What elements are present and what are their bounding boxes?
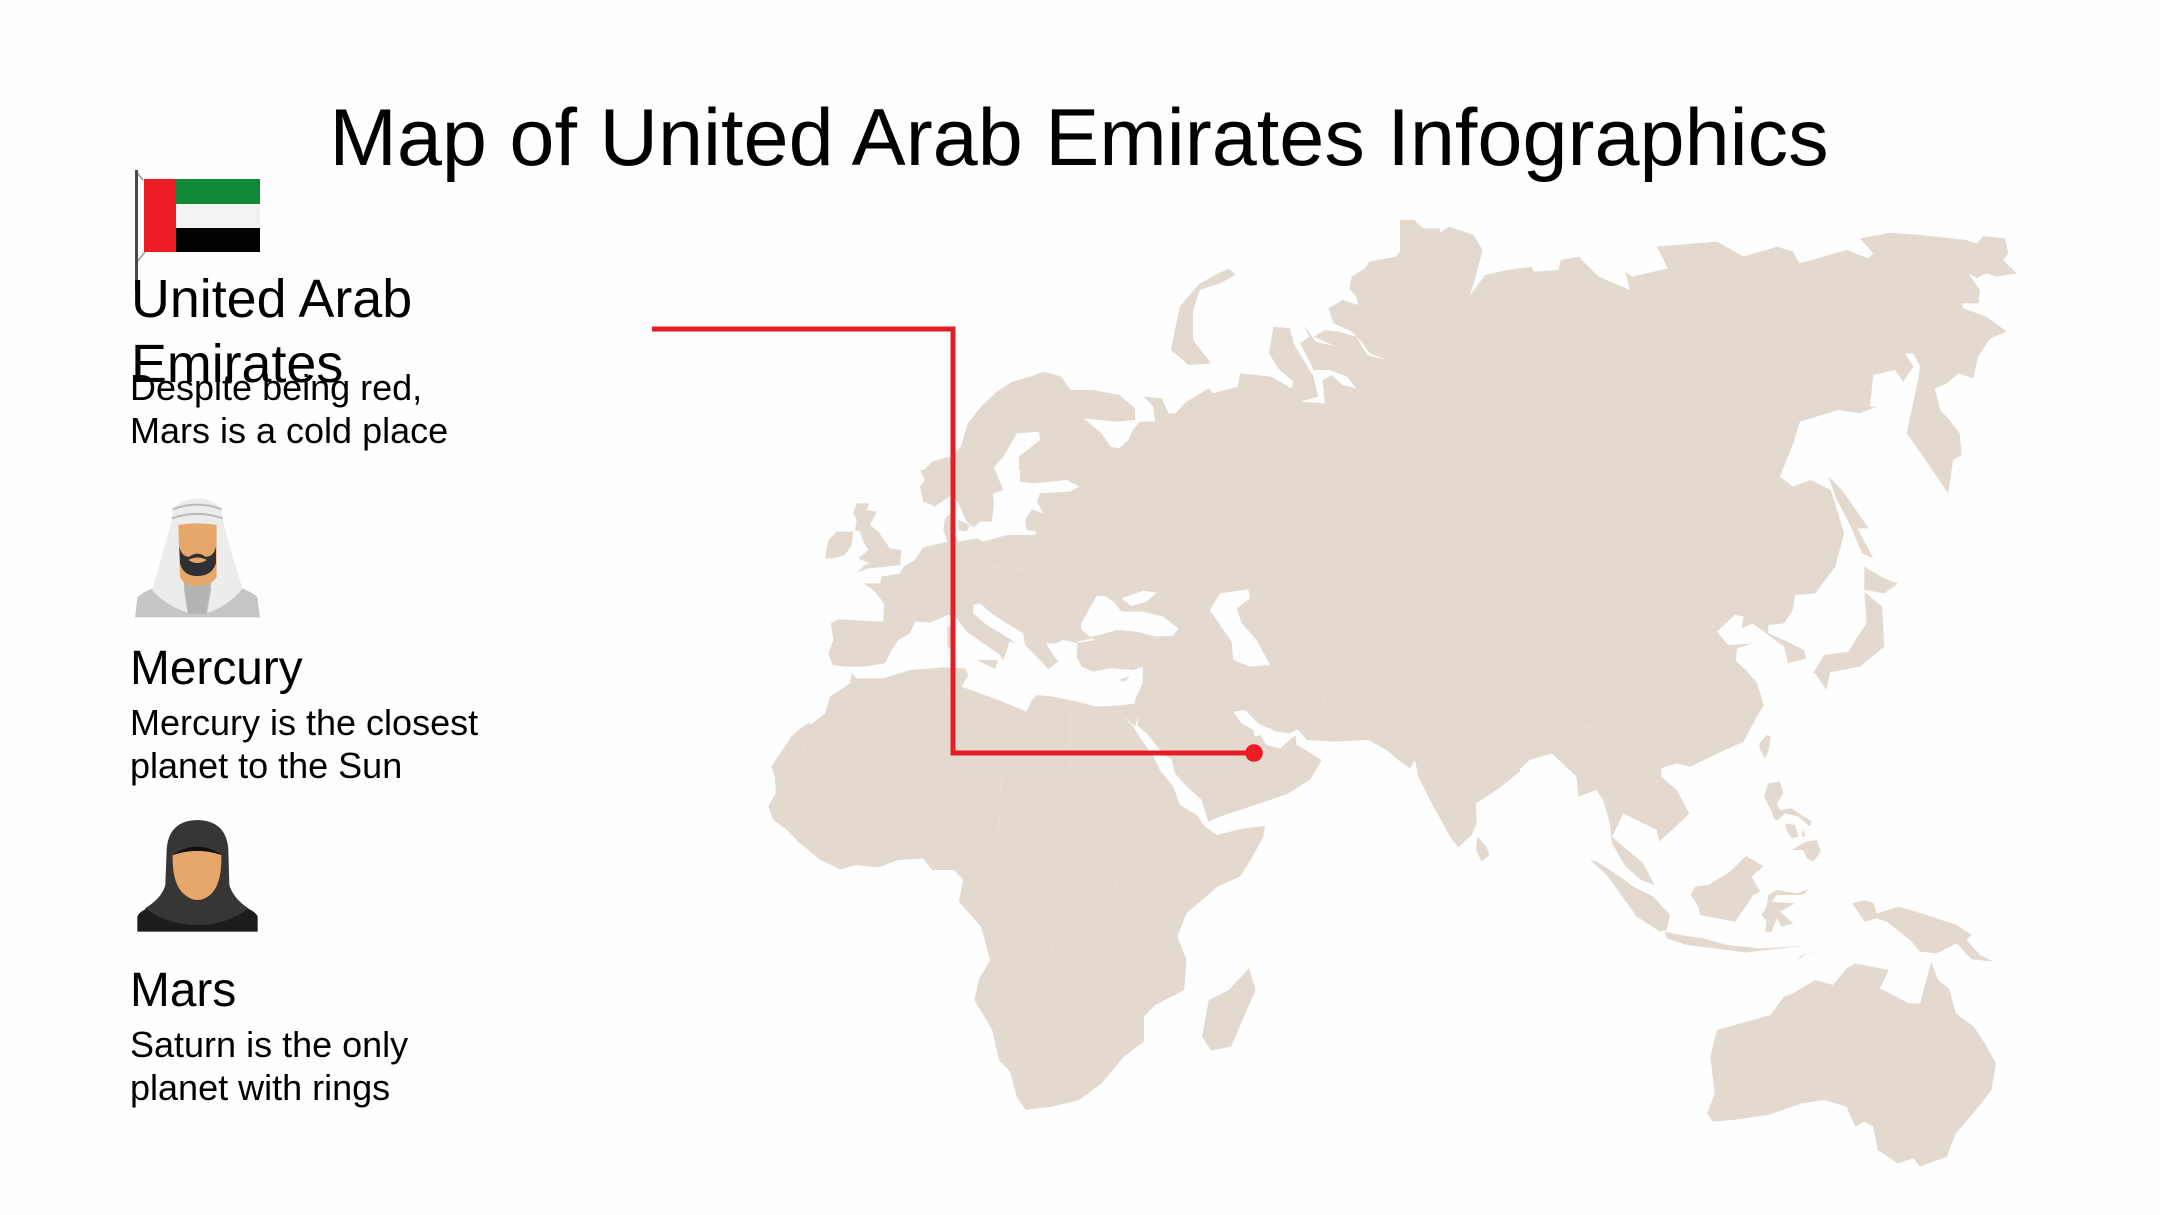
icon: UAE flag bbox=[135, 170, 260, 290]
text: Mercury description: planet to the Sun bbox=[130, 745, 402, 786]
map: Ireland bbox=[825, 532, 853, 558]
map: Mediterranean Sea bbox=[845, 615, 1143, 712]
map: Sri Lanka bbox=[1476, 837, 1489, 862]
title: Map of United Arab Emirates Infographics bbox=[329, 93, 1829, 183]
map: Europe and Mediterranean detail bbox=[810, 470, 1210, 770]
map: Africa bbox=[768, 668, 1265, 1110]
connector line to UAE bbox=[652, 329, 1254, 753]
map: Madagascar bbox=[1202, 968, 1256, 1051]
map: Timor bbox=[1795, 950, 1822, 962]
map: Danish islands bbox=[958, 520, 970, 532]
map: Adriatic Sea bbox=[973, 603, 1025, 645]
map: Borneo bbox=[1691, 856, 1763, 922]
map: Atlantic coast bbox=[810, 470, 953, 725]
map: Red Sea bbox=[1122, 715, 1208, 827]
map: South and South-East Asia bbox=[1400, 660, 1996, 1167]
world map bbox=[768, 220, 2017, 1167]
map: Persian Gulf bbox=[1233, 710, 1298, 748]
map: Middle East and India detail bbox=[1120, 560, 1520, 862]
map: Novaya Zemlya bbox=[1171, 268, 1236, 365]
heading: United Arab Emirates: United Arab bbox=[131, 269, 412, 329]
icon: woman in hijab bbox=[137, 820, 258, 932]
map: Sakhalin bbox=[1829, 477, 1873, 558]
map: northern Europe and western Russia bbox=[921, 220, 1440, 700]
map: Mediterranean islands bbox=[947, 627, 1130, 682]
map: Sulawesi bbox=[1762, 889, 1808, 932]
map: New Guinea bbox=[1852, 900, 1993, 962]
map: Caspian Sea bbox=[1210, 589, 1270, 667]
map: Japan bbox=[1813, 567, 1898, 690]
heading: United Arab Emirates: Emirates bbox=[131, 334, 343, 394]
icon: man in keffiyeh bbox=[135, 498, 260, 617]
map: Australia bbox=[1707, 962, 1996, 1167]
map: Sumatra bbox=[1590, 860, 1670, 932]
location marker: UAE bbox=[1245, 744, 1263, 762]
map: Indian Ocean bbox=[1205, 730, 1520, 860]
map: Baltic Sea bbox=[954, 470, 1079, 542]
heading: Mars: Mars bbox=[130, 964, 236, 1017]
map: Great Britain bbox=[853, 503, 902, 573]
map: Sea of Azov bbox=[1122, 591, 1157, 606]
text: Mars description: planet with rings bbox=[130, 1067, 390, 1108]
map: Siberia, China and the Far East bbox=[1400, 220, 2017, 700]
map: Java and Lesser Sunda bbox=[1665, 932, 1805, 953]
map: East Indies islands bbox=[1590, 735, 1993, 962]
text: Mercury description: Mercury is the closest bbox=[130, 702, 478, 743]
map: Taiwan bbox=[1759, 735, 1771, 758]
heading: Mercury: Mercury bbox=[130, 642, 303, 695]
map: Sea of Marmara bbox=[1077, 638, 1095, 643]
map: Black Sea bbox=[1081, 596, 1178, 637]
text: Mars description: Saturn is the only bbox=[130, 1024, 408, 1065]
text: United Arab Emirates description: Despite being red, bbox=[130, 367, 422, 408]
map: Philippines bbox=[1764, 782, 1821, 862]
text: United Arab Emirates description: Mars is a cold place bbox=[130, 410, 448, 451]
